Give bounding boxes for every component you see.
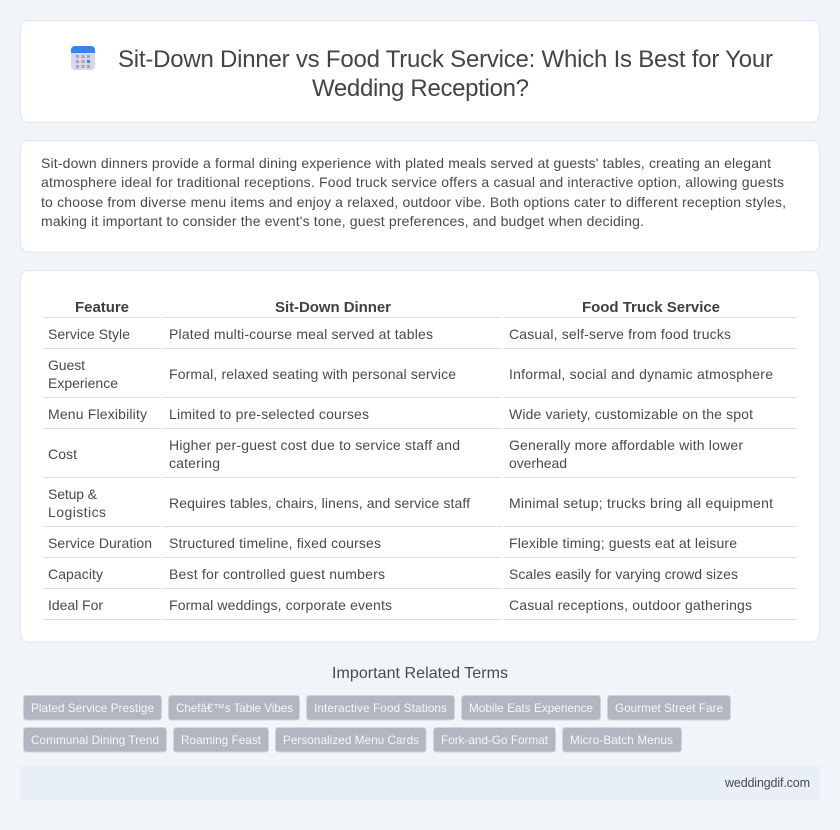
- row: guest experience: Guest: [48, 357, 85, 373]
- row: capacity: [48, 566, 738, 582]
- text block: description: to choose from diverse menu items and enjoy a relaxed, outdoor vibe. Both options cater to different reception styles,: [41, 194, 786, 210]
- row: setup and logistics: [48, 486, 773, 520]
- tags: related terms: Communal Dining Trend: [31, 734, 159, 747]
- footer: weddingdif.com: [724, 776, 810, 790]
- row: menu flexibility: [48, 406, 753, 422]
- row: service style: Casual, self-serve from food trucks: [509, 326, 731, 342]
- tags: related terms: Chefâ€™s Table Vibes: [176, 702, 293, 715]
- panel: header card: [20, 20, 820, 122]
- row: menu flexibility: Limited to pre-selected courses: [169, 406, 369, 422]
- tags: related terms: [24, 696, 730, 752]
- row: ideal for: [48, 597, 752, 613]
- text block: description: Sit-down dinners provide a formal dining experience with plated meals served at guests' tables, creating an elegant: [41, 155, 771, 171]
- row: cost: [48, 437, 743, 471]
- row: service duration: Structured timeline, fixed courses: [169, 535, 381, 551]
- row: service duration: Flexible timing; guests eat at leisure: [509, 535, 737, 551]
- title: [118, 46, 773, 102]
- row: setup and logistics: Requires tables, chairs, linens, and service staff: [169, 495, 470, 511]
- row: cost: Generally more affordable with lower: [509, 437, 743, 453]
- tags: related terms: Roaming Feast: [181, 734, 262, 747]
- row: guest experience: Informal, social and dynamic atmosphere: [509, 366, 773, 382]
- table header: Feature: [75, 299, 129, 316]
- panel: comparison table: [20, 270, 820, 642]
- row: service duration: Service Duration: [48, 535, 152, 551]
- row: capacity: Scales easily for varying crowd sizes: [509, 566, 738, 582]
- row: setup and logistics: Setup &: [48, 486, 98, 502]
- text block: description: making it important to consider the event's tone, guest preferences, and budget when deciding.: [41, 213, 644, 229]
- row: guest experience: [48, 357, 773, 391]
- row: service style: [48, 326, 731, 342]
- footer: [20, 766, 820, 800]
- table header: [75, 299, 720, 316]
- row: ideal for: Ideal For: [48, 597, 103, 613]
- tags: related terms: Gourmet Street Fare: [615, 702, 723, 715]
- text block: description: atmosphere ideal for traditional receptions. Food truck service offers a casual and interactive option, allowing guests: [41, 174, 784, 190]
- row: guest experience: Experience: [48, 375, 118, 391]
- row: setup and logistics: Logistics: [48, 504, 106, 520]
- table header: Food Truck Service: [582, 299, 720, 316]
- heading: related terms: Important Related Terms: [332, 665, 508, 682]
- title: Sit-Down Dinner vs Food Truck Service: Which Is Best for Your: [118, 46, 773, 73]
- row: service style: Service Style: [48, 326, 130, 342]
- icon: calendar: [71, 46, 95, 70]
- tags: related terms: Mobile Eats Experience: [469, 702, 593, 715]
- tags: related terms: Fork-and-Go Format: [441, 734, 549, 747]
- row: menu flexibility: Menu Flexibility: [48, 406, 147, 422]
- tags: related terms: Interactive Food Stations: [314, 702, 447, 715]
- row: capacity: Best for controlled guest numbers: [169, 566, 385, 582]
- table header: Sit-Down Dinner: [275, 299, 391, 316]
- row: capacity: Capacity: [48, 566, 103, 582]
- tags: related terms: Personalized Menu Cards: [283, 734, 419, 747]
- row: menu flexibility: Wide variety, customizable on the spot: [509, 406, 753, 422]
- row: setup and logistics: Minimal setup; trucks bring all equipment: [509, 495, 773, 511]
- tags: related terms: Micro-Batch Menus: [570, 734, 673, 747]
- title: Wedding Reception?: [312, 75, 529, 102]
- row: ideal for: Casual receptions, outdoor gatherings: [509, 597, 752, 613]
- row: cost: Cost: [48, 446, 77, 462]
- row: ideal for: Formal weddings, corporate events: [169, 597, 392, 613]
- row: cost: catering: [169, 455, 220, 471]
- panel: description card: [20, 140, 820, 252]
- row: service duration: [48, 535, 737, 551]
- row: service style: Plated multi-course meal served at tables: [169, 326, 433, 342]
- tags: related terms: Plated Service Prestige: [31, 702, 154, 715]
- row: cost: overhead: [509, 455, 567, 471]
- row: cost: Higher per-guest cost due to service staff and: [169, 437, 460, 453]
- text block: description: [41, 155, 786, 229]
- row: guest experience: Formal, relaxed seating with personal service: [169, 366, 456, 382]
